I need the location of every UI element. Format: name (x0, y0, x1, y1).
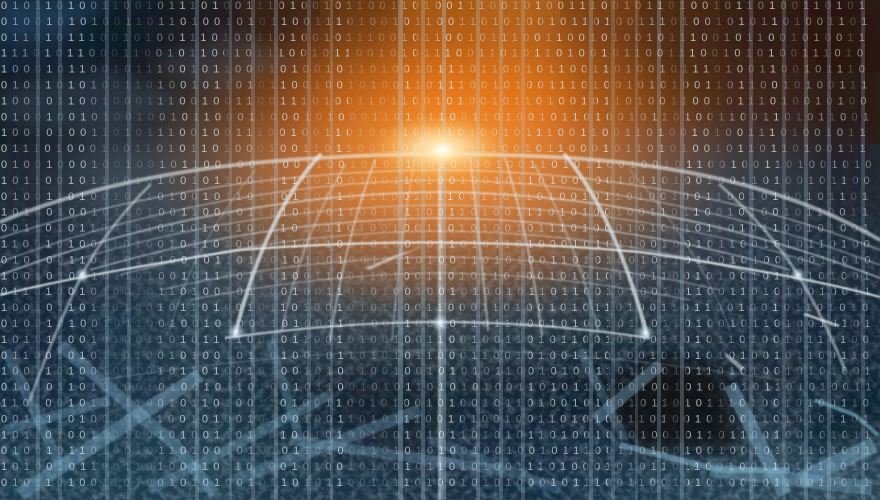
binary digit matrix: 010010010100100101100011000101000110101100110100101101001011010011001101011001 (1, 111, 869, 123)
binary digit matrix: 001011010010111001010010100100110101110010100100110101001101001010011010101101 (1, 413, 869, 425)
binary digit matrix: 010010001001001011001001000110010101100101001001101011001001011001001101001010 (1, 159, 871, 171)
binary digit matrix: 111010110001100101100101110010110010101110011010110100101100111001010100111010 (1, 48, 863, 60)
binary digit matrix: 010010110100101101001010101101001101010100100100101110011010010010010101101001 (1, 445, 871, 457)
binary digit matrix: 100101100100011100100110011101001101100101001011010010110100110010111010010100 (1, 95, 866, 107)
binary digit matrix: 010110100110100101010010110101100101101001010100010111001100101010010110010011 (1, 477, 870, 489)
binary digit matrix: 010011010010110100101101001100101110010110011001010010110100100110010100101101 (1, 191, 868, 203)
binary digit matrix: 011101000100110101101000100110110011001010111001011000101101010010110110100111 (1, 143, 866, 155)
binary digit matrix: 010100110100101001011010010110100101101001101010011010100101101001010010011010 (1, 254, 871, 266)
binary digit matrix: 010010101001101101001010110011101001011001101010010110100111010010101101001101 (1, 16, 867, 28)
binary digit matrix: 110100101001100101101001101001100101001010010110100101001011010111010010100110 (1, 398, 869, 410)
binary digit matrix: 011010111001010011101001101001011100101100101110011001010010111001011001010011 (1, 32, 865, 44)
network struts across lower globe (6, 340, 878, 494)
binary digit matrix: 100101001101011100100111001001101001100110100101110011001101001010011101001011 (1, 127, 866, 139)
dark voids in lower globe (330, 355, 880, 470)
globe surface texture (0, 160, 880, 500)
globe meridian lines (30, 155, 845, 498)
orange glow above the horizon (150, 0, 730, 310)
binary digit matrix: 101101001101001010011011010010100100101011010101101001010100101101100100101011 (1, 429, 871, 441)
city lights speckle (365, 248, 840, 371)
clouds in the upper sky (0, 0, 300, 130)
binary digit matrix: 101001001011010011001011010010110010110011010011101010010011011001010010110011 (1, 207, 868, 219)
sun flare on the horizon (370, 114, 510, 182)
binary digit matrix: 010010100101100100101001101001101001100101101100010100101001101001011010010101 (1, 318, 871, 330)
glowing network nodes (74, 267, 806, 342)
binary digit matrix: 011010010100101101001011001001101010010010100101101100101001011001101010010011 (1, 286, 871, 298)
binary digit matrix: 101001011001101001101101001010010100101101010011101000101011011001001101010010 (1, 461, 869, 473)
binary digit matrix: 100101001011010010110011010011001101001101011010010101010011001010010110101001 (1, 270, 870, 282)
binary digit matrix: 001101011001010110100100110101101001001101010010111010001010010110101100101001 (1, 223, 869, 235)
binary digit matrix: 101100101100101001011001011001001001101001001011010010010110100100110100101100 (1, 175, 870, 187)
binary digit matrix: 100110100101101011010010100101011001001010101100101001101100101101010010101001 (1, 366, 871, 378)
binary digit matrix: 110010100110100101101001011001001010010110101101000101011001001011001010110100 (1, 238, 870, 250)
binary digit matrix: 010110101001101001011010110010010100110111001010011101001010100110110010100111 (1, 80, 867, 92)
binary digit matrix: 011001010110100101001011010010110101011000110010100111010010101010100101100110 (1, 350, 869, 362)
binary digit matrix: 010110100110010111010011101001011001101001110010100111001011010010110100110101 (1, 0, 865, 12)
binary digit matrix: 100101101101001011010010110100101011001100011010010101101001101100100101101010 (1, 302, 868, 314)
binary digit matrix: 101011001010011010110100101100101001001100100110101100101001101011010010110100 (1, 334, 869, 346)
binary digit matrix: 010101101010010100101101001011001010110101010011010110100100101000101101010011 (1, 382, 871, 394)
globe latitude lines (0, 154, 880, 380)
binary digit matrix: 100010110010111001011000101001011010010111011001011001101001011101001100101110 (1, 64, 865, 76)
